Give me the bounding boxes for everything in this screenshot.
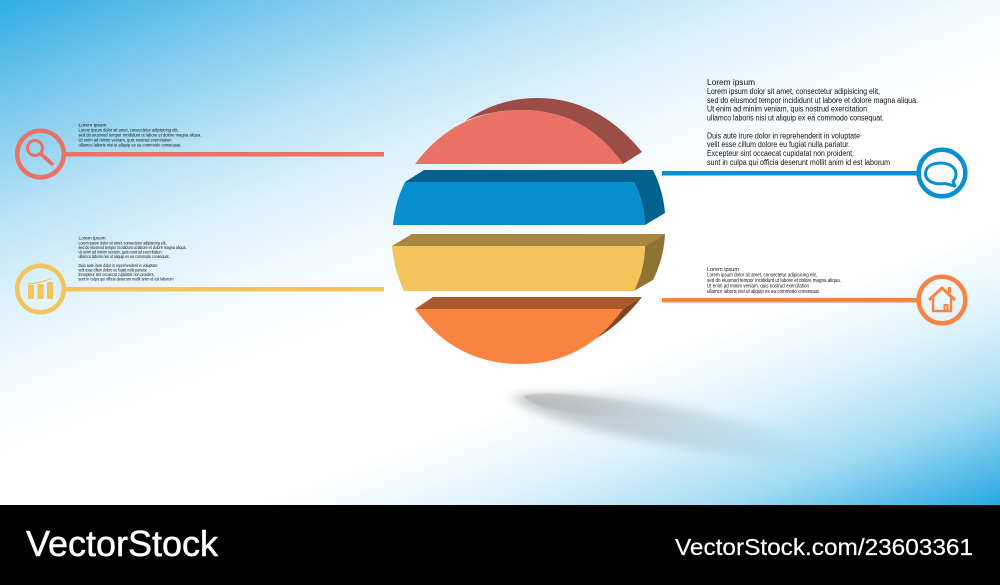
slice: blue (393, 170, 665, 225)
text block orange: ullamco laboris nisi ut aliquip ex ea commodo consequat. (707, 289, 820, 295)
slice: orange (415, 297, 642, 364)
text block orange: Ut enim ad minim veniam, quis nostrud exercitation (707, 283, 809, 289)
text block yellow: ullamco laboris nisi ut aliquip ex ea commodo consequat. (78, 254, 170, 259)
footer bar (0, 505, 1000, 585)
footer url: VectorStock.com/23603361 (675, 534, 973, 560)
text block yellow: Lorem ipsum (78, 236, 106, 240)
text block yellow: sed do eiusmod tempor incididunt ut labore et dolore magna aliqua. (78, 245, 186, 250)
text block yellow: Ut enim ad minim veniam, quis nostrud exercitation (78, 250, 162, 255)
text block yellow (78, 236, 186, 282)
footer logo: VectorStock (26, 523, 219, 564)
icon: bar chart (17, 266, 64, 312)
text block red: ullamco laboris nisi ut aliquip ex ea commodo consequat. (78, 142, 182, 148)
callout: bottom left (yellow) (17, 236, 384, 312)
text block blue: sunt in culpa qui officia deserunt mollit anim id est laborum (707, 158, 890, 167)
text block red: sed do eiusmod tempor incididunt ut labore et dolore magna aliqua. (78, 132, 202, 138)
connector line yellow (65, 287, 384, 292)
text block blue: Lorem ipsum (707, 77, 755, 87)
text block orange (707, 267, 841, 295)
text block blue: sed do eiusmod tempor incididunt ut labore et dolore magna aliqua. (707, 96, 918, 105)
callout: top left (red) (17, 122, 384, 177)
callout: bottom right (orange) (662, 267, 965, 323)
text block red: Lorem ipsum (78, 122, 107, 128)
text block blue (707, 77, 918, 167)
icon: house (919, 277, 965, 323)
sliced sphere (392, 98, 665, 364)
connector line red (65, 152, 384, 156)
text block blue: velit esse cillum dolore eu fugiat nulla pariatur. (707, 140, 850, 149)
callout: top right (blue) (662, 77, 965, 196)
text block blue: Ut enim ad minim veniam, quis nostrud exercitation (707, 104, 867, 114)
text block red: Ut enim ad minim veniam, quis nostrud exercitation (78, 138, 172, 142)
text block yellow: Lorem ipsum dolor sit amet, consectetur adipisicing elit, (78, 240, 166, 246)
connector line blue (662, 171, 918, 176)
icon: magnifier (17, 131, 64, 177)
text block blue: Excepteur sint occaecat cupidatat non proident, (707, 149, 854, 158)
sphere shadow (510, 394, 820, 464)
text block yellow: velit esse cillum dolore eu fugiat nulla pariatur. (78, 268, 148, 272)
text block blue: Duis aute irure dolor in reprehenderit in voluptate (707, 132, 860, 140)
text block yellow: sunt in culpa qui officia deserunt mollit anim id est laborum (78, 277, 174, 282)
text block orange: Lorem ipsum (707, 267, 739, 273)
text block yellow: Excepteur sint occaecat cupidatat non proident, (78, 272, 154, 277)
text block blue: ullamco laboris nisi ut aliquip ex ea commodo consequat. (707, 114, 884, 122)
text block yellow: Duis aute irure dolor in reprehenderit in voluptate (78, 263, 158, 268)
text block orange: Lorem ipsum dolor sit amet, consectetur adipisicing elit, (707, 272, 817, 278)
text block red: Lorem ipsum dolor sit amet, consectetur adipisicing elit, (78, 128, 178, 132)
icon: speech bubble (919, 150, 965, 196)
slice: red (415, 98, 642, 164)
text block orange: sed do eiusmod tempor incididunt ut labore et dolore magna aliqua. (707, 278, 841, 284)
text block blue: Lorem ipsum dolor sit amet, consectetur adipisicing elit, (707, 87, 880, 96)
text block red (78, 122, 202, 148)
slice: yellow (392, 234, 665, 291)
connector line orange (662, 298, 918, 302)
